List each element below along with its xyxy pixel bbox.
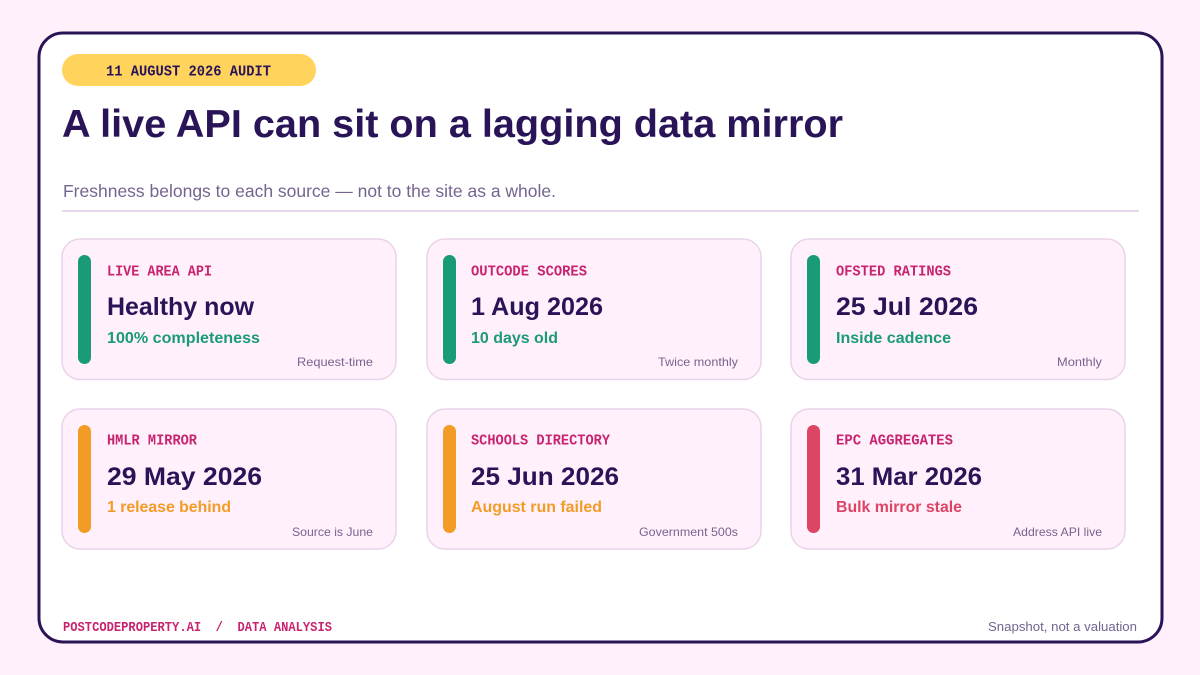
- note: Government 500s: [639, 525, 738, 539]
- note: Source is June: [292, 525, 373, 539]
- value: 1 Aug 2026: [471, 293, 603, 321]
- card: EPC aggregates: [791, 409, 1125, 549]
- status: 10 days old: [471, 330, 558, 347]
- status bar: green: [807, 255, 820, 364]
- value: 29 May 2026: [107, 463, 262, 491]
- status bar: amber: [78, 425, 91, 533]
- value: 25 Jun 2026: [471, 463, 619, 491]
- status: 100% completeness: [107, 330, 260, 347]
- footer: brand: POSTCODEPROPERTY.AI / DATA ANALYSIS: [63, 620, 332, 636]
- source label: EPC AGGREGATES: [836, 432, 953, 450]
- note: Address API live: [1013, 525, 1102, 539]
- status bar: green: [78, 255, 91, 364]
- note: Twice monthly: [658, 355, 738, 369]
- date badge: 11 AUGUST 2026 AUDIT: [106, 64, 271, 80]
- note: Monthly: [1057, 355, 1102, 369]
- note: Request-time: [297, 355, 373, 369]
- value: 25 Jul 2026: [836, 293, 978, 321]
- subtitle: Freshness belongs to each source — not to the site as a whole.: [63, 181, 556, 201]
- title: A live API can sit on a lagging data mirror: [62, 103, 843, 146]
- card: HMLR mirror: [62, 409, 396, 549]
- status: 1 release behind: [107, 499, 231, 516]
- card: outcode scores: [427, 239, 761, 380]
- value: 31 Mar 2026: [836, 463, 982, 491]
- date badge: [62, 54, 316, 86]
- source label: OUTCODE SCORES: [471, 264, 587, 280]
- card: ofsted ratings: [791, 239, 1125, 380]
- card: live area API: [62, 239, 396, 380]
- source label: SCHOOLS DIRECTORY: [471, 432, 610, 450]
- card: schools directory: [427, 409, 761, 549]
- source label: OFSTED RATINGS: [836, 264, 951, 280]
- source label: HMLR MIRROR: [107, 432, 197, 450]
- source label: LIVE AREA API: [107, 264, 212, 280]
- status bar: amber: [443, 425, 456, 533]
- status: Bulk mirror stale: [836, 499, 962, 516]
- footer: disclaimer: Snapshot, not a valuation: [988, 619, 1137, 634]
- status bar: green: [443, 255, 456, 364]
- value: Healthy now: [107, 293, 255, 321]
- status bar: red: [807, 425, 820, 533]
- status: Inside cadence: [836, 330, 951, 347]
- status: August run failed: [471, 499, 602, 516]
